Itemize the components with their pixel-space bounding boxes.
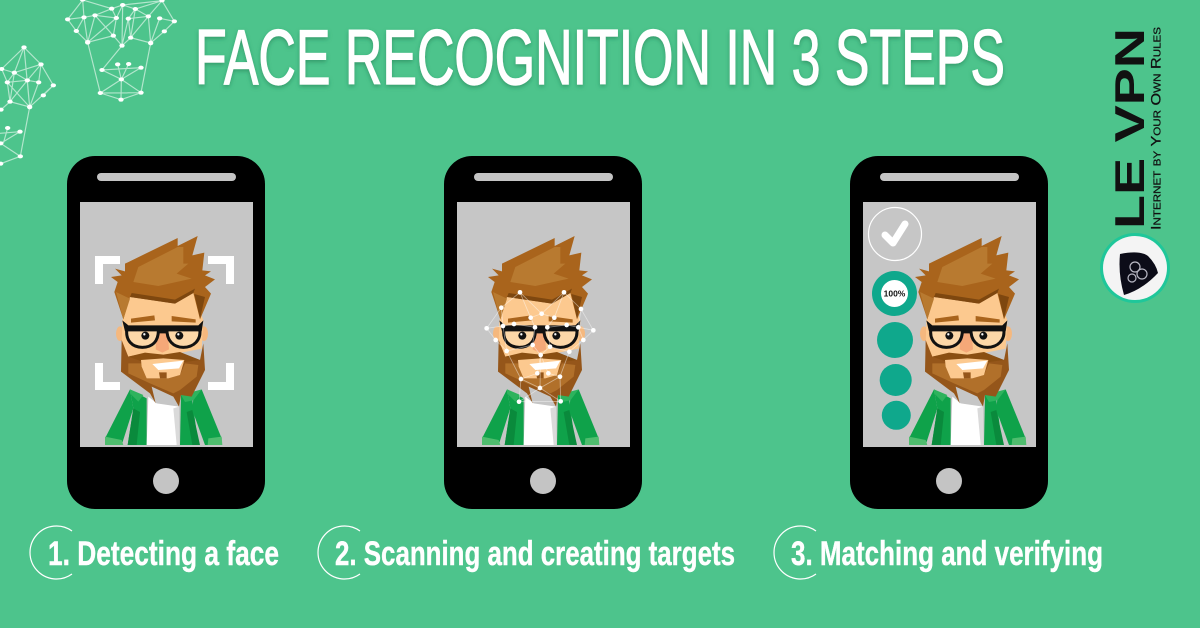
matching progress dots bbox=[877, 322, 913, 430]
icon: check mark bbox=[868, 208, 922, 260]
icon: face scanning mesh bbox=[484, 290, 596, 404]
progress ring: 100% bbox=[872, 271, 917, 316]
step 3 label: 3. Matching and verifying bbox=[791, 535, 1103, 573]
logo: Le VPN wordmark: LE VPN bbox=[1106, 28, 1153, 229]
phone 2: scanning and creating targets bbox=[444, 156, 642, 509]
icon: face detection brackets bbox=[95, 256, 234, 390]
decorative network: left bbox=[0, 45, 56, 166]
logo: Le VPN wordmark bbox=[1106, 27, 1164, 230]
logo: shield emblem bbox=[1100, 233, 1170, 303]
phone 1: detecting a face bbox=[67, 156, 265, 509]
decorative network: top bbox=[65, 0, 177, 102]
step 2 label: 2. Scanning and creating targets bbox=[335, 535, 735, 573]
logo tagline: Internet by Your Own Rules bbox=[1148, 27, 1164, 230]
step 1 label bbox=[30, 526, 279, 579]
phone 3: matching and verifying bbox=[850, 156, 1048, 509]
step 2 label bbox=[318, 526, 735, 579]
progress ring: 100%: 100% bbox=[884, 288, 906, 298]
step 1 label: 1. Detecting a face bbox=[48, 535, 279, 573]
step 3 label bbox=[774, 526, 1103, 579]
